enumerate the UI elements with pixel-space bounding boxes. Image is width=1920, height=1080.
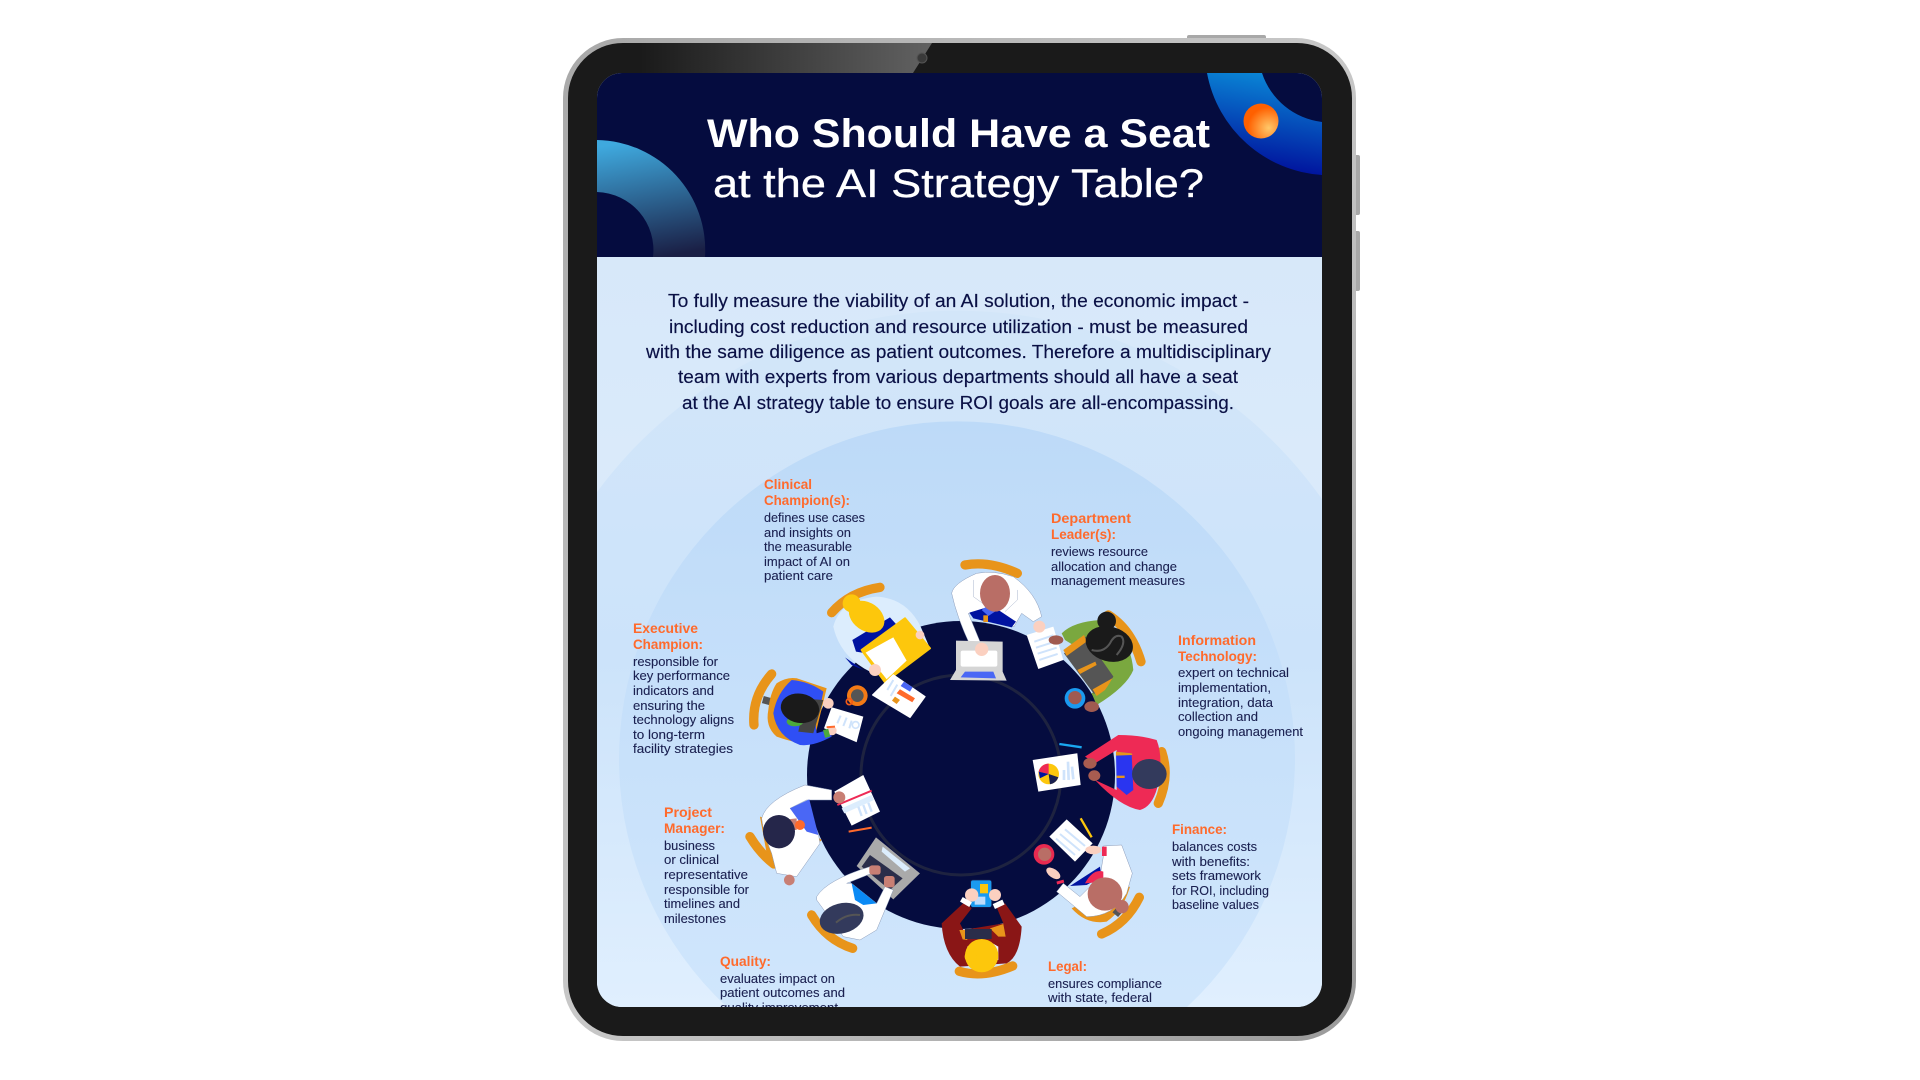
intro paragraph: including cost reduction and resource utilization - must be measured (669, 317, 1248, 337)
label: project manager: Manager: (664, 820, 725, 836)
label: executive champion: indicators and (633, 683, 714, 698)
label: department leaders: reviews resource (1051, 544, 1148, 559)
label: quality: Quality: (720, 953, 771, 969)
label: executive champion: technology aligns (633, 712, 734, 727)
label: clinical champions: defines use cases (764, 510, 865, 525)
label: executive champion: Champion: (633, 636, 703, 652)
tablet frame (563, 35, 1360, 1041)
label: executive champion (633, 620, 734, 756)
label: department leaders: Department (1051, 510, 1131, 526)
label: executive champion: Executive (633, 620, 698, 636)
label: clinical champions (764, 476, 865, 583)
label: quality: patient outcomes and (720, 985, 845, 1000)
person: executive champion (754, 674, 863, 745)
label: clinical champions: impact of AI on (764, 554, 850, 569)
label: information technology: expert on technical (1178, 665, 1289, 680)
person: information technology (1049, 612, 1141, 712)
label: information technology: Technology: (1178, 648, 1257, 664)
person: clinical champion (832, 587, 930, 717)
title (707, 112, 1210, 206)
label: project manager: business (664, 838, 715, 853)
person: legal (942, 880, 1022, 974)
label: finance: sets framework (1172, 868, 1261, 883)
label: quality: evaluates impact on (720, 971, 835, 986)
label: project manager: Project (664, 804, 712, 820)
label: clinical champions: patient care (764, 568, 833, 583)
person: department leader (950, 564, 1063, 681)
label: project manager: or clinical (664, 852, 719, 867)
label: department leaders (1051, 510, 1185, 588)
person: legal-side white coat (1034, 818, 1139, 934)
person: finance (1033, 735, 1167, 810)
label: finance: baseline values (1172, 897, 1259, 912)
middle background circle (619, 421, 1295, 1007)
title: Who Should Have a Seat (707, 112, 1210, 156)
label: information technology: ongoing management (1178, 724, 1303, 739)
outer background circle (597, 411, 1322, 1007)
label: department leaders: Leader(s): (1051, 526, 1116, 542)
label: quality: quality improvement (720, 1000, 838, 1015)
round table (807, 621, 1115, 929)
title: at the AI Strategy Table? (713, 162, 1204, 206)
intro paragraph: with the same diligence as patient outcomes. Therefore a multidisciplinary (645, 342, 1271, 362)
label: clinical champions: and insights on (764, 525, 851, 540)
label: information technology: Information (1178, 632, 1256, 648)
label: project manager: milestones (664, 911, 726, 926)
intro paragraph: To fully measure the viability of an AI solution, the economic impact - (668, 291, 1249, 311)
label: finance: with benefits: (1171, 854, 1250, 869)
panel: header (597, 73, 1322, 257)
person: project manager (750, 775, 880, 885)
label: information technology: implementation, (1178, 680, 1271, 695)
label: finance: Finance: (1172, 821, 1227, 837)
label: quality (720, 956, 844, 1007)
label: executive champion: ensuring the (633, 698, 705, 713)
label: finance (1171, 821, 1269, 912)
label: project manager: representative (664, 867, 748, 882)
label: executive champion: key performance (633, 668, 730, 683)
label: clinical champions: Champion(s): (764, 492, 850, 508)
label: information technology: collection and (1178, 709, 1258, 724)
label: executive champion: responsible for (633, 654, 719, 669)
label: clinical champions: the measurable (764, 539, 852, 554)
label: finance: balances costs (1172, 839, 1257, 854)
label: legal: ensures compliance (1048, 976, 1162, 991)
label: project manager: timelines and (664, 896, 740, 911)
label: project manager: responsible for (664, 882, 750, 897)
person: quality (812, 837, 920, 948)
label: legal (1047, 958, 1162, 1005)
label: department leaders: management measures (1051, 573, 1185, 588)
label: legal: Legal: (1048, 958, 1087, 974)
label: executive champion: facility strategies (633, 741, 734, 756)
label: executive champion: to long-term (633, 727, 705, 742)
label: finance: for ROI, including (1172, 883, 1269, 898)
label: project manager (664, 804, 750, 926)
intro paragraph (645, 291, 1271, 413)
label: legal: with state, federal (1047, 990, 1152, 1005)
label: clinical champions: Clinical (764, 476, 812, 492)
label: department leaders: allocation and change (1051, 559, 1177, 574)
label: information technology: integration, data (1178, 695, 1274, 710)
label: information technology (1178, 632, 1303, 739)
intro paragraph: at the AI strategy table to ensure ROI goals are all-encompassing. (682, 393, 1234, 413)
screen (597, 73, 1322, 1015)
intro paragraph: team with experts from various departments should all have a seat (678, 367, 1238, 387)
